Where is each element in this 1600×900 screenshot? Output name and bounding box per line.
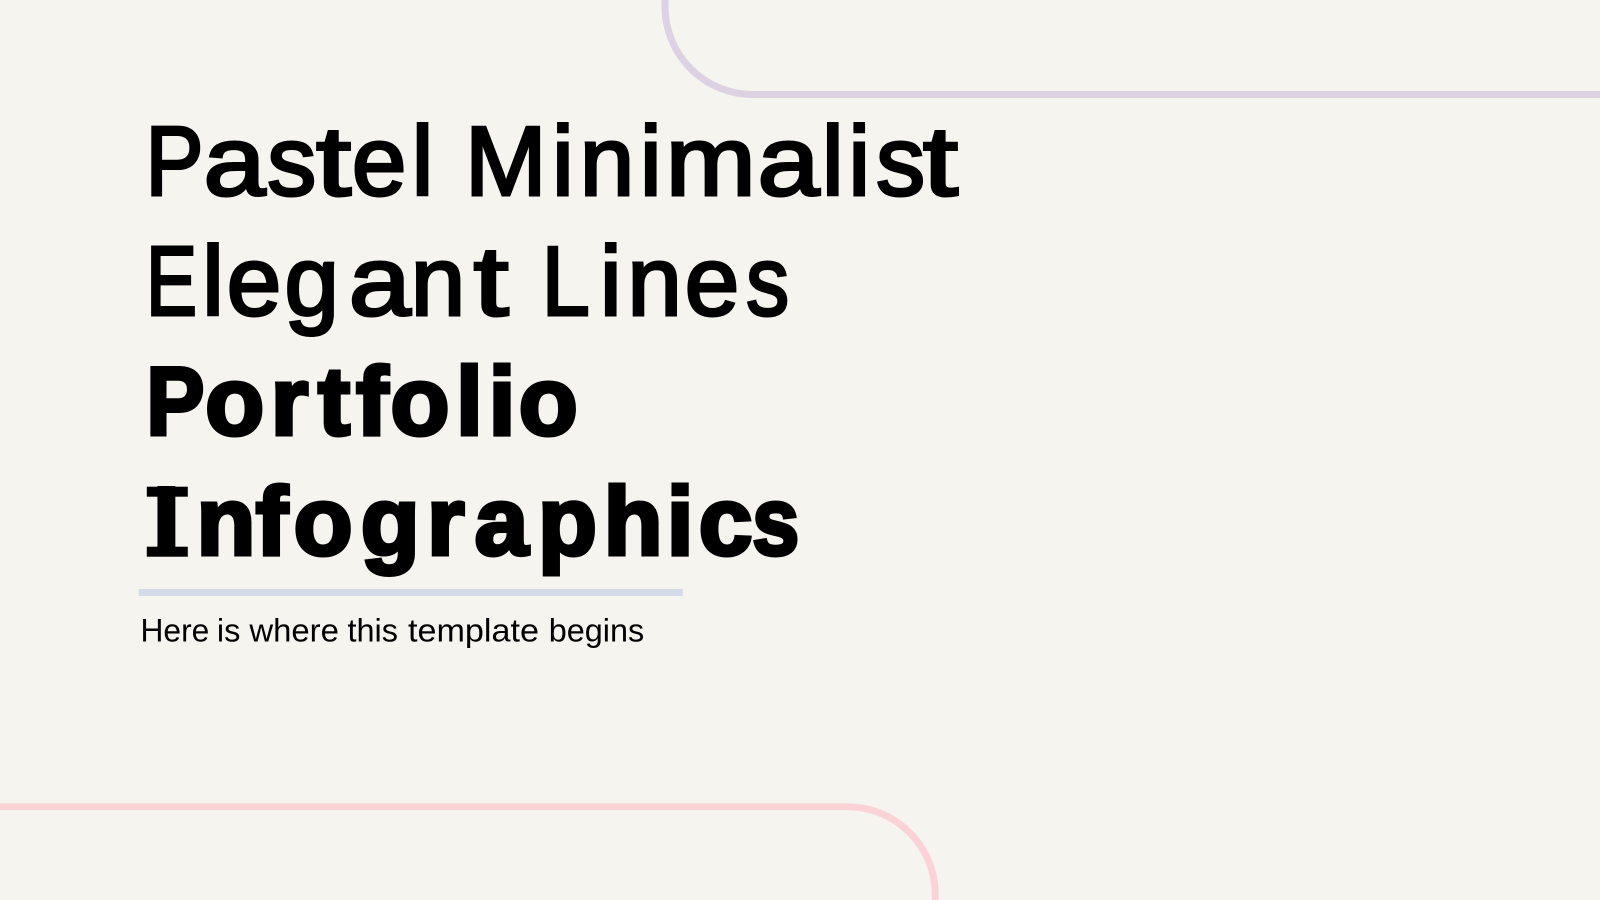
title line: Pastel Minimalist: P bbox=[146, 106, 204, 216]
title line: Portfolio: ortfolio bbox=[205, 349, 578, 456]
decorative line: bottom left pink curve bbox=[0, 807, 935, 900]
title line: Infographics: s bbox=[752, 469, 799, 576]
title line: Elegant Lines: E bbox=[146, 226, 197, 336]
title line: Elegant Lines: s bbox=[746, 226, 789, 336]
subtitle: Here bbox=[140, 612, 209, 649]
title line: Pastel Minimalist: m bbox=[666, 106, 756, 216]
underline rule bbox=[139, 589, 683, 596]
title line: Pastel Minimalist: t bbox=[923, 106, 958, 216]
title line: Elegant Lines: a bbox=[349, 226, 411, 336]
title line: Elegant Lines: n bbox=[411, 226, 465, 336]
title line: Infographics: Infographic bbox=[153, 469, 752, 576]
subtitle: begins bbox=[549, 612, 644, 649]
subtitle: this bbox=[348, 612, 398, 649]
title line: Elegant Lines: t bbox=[474, 226, 509, 336]
subtitle: template bbox=[408, 612, 539, 649]
title line: Pastel Minimalist: a bbox=[204, 106, 266, 216]
title line: Pastel Minimalist: lis bbox=[822, 106, 925, 216]
title line: Pastel Minimalist: a bbox=[758, 106, 820, 216]
subtitle: is bbox=[217, 612, 240, 649]
title line: Portfolio: P bbox=[146, 349, 204, 456]
title line: Pastel Minimalist: s bbox=[267, 106, 316, 216]
title line: Pastel Minimalist: t bbox=[316, 106, 351, 216]
decorative line: top right lilac curve bbox=[665, 0, 1600, 94]
title line: Pastel Minimalist: el Mini bbox=[352, 106, 662, 216]
subtitle: where bbox=[248, 612, 339, 649]
title bbox=[146, 106, 958, 576]
title line: Elegant Lines: ine bbox=[600, 226, 739, 336]
title line: Elegant Lines: L bbox=[542, 226, 590, 336]
title line: Elegant Lines: leg bbox=[202, 226, 339, 336]
